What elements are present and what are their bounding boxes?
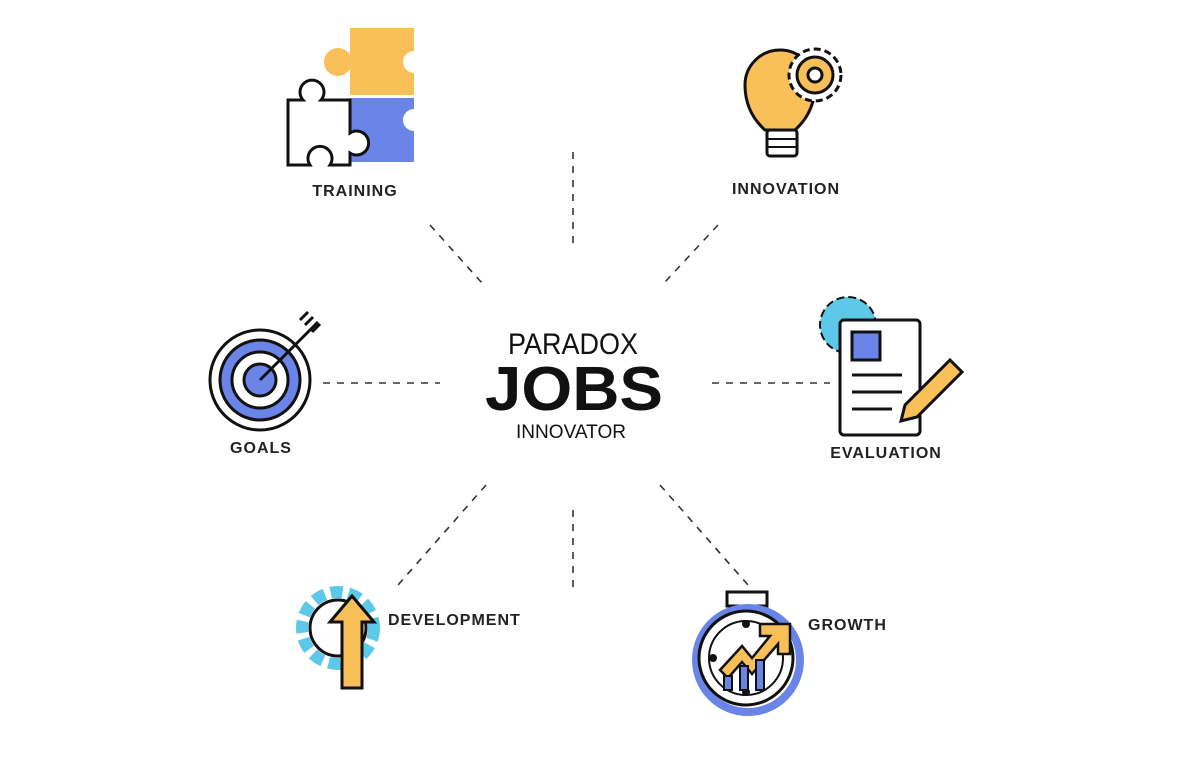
- icon: goals target: [210, 312, 320, 457]
- icon: growth stopwatch: [696, 592, 887, 712]
- title: INNOVATOR: [516, 422, 626, 443]
- icon: innovation bulb: [732, 49, 841, 198]
- icon: growth stopwatch: GROWTH: [808, 617, 887, 634]
- icon: goals target: GOALS: [230, 440, 292, 457]
- icon: evaluation document: [820, 297, 962, 462]
- icon: training puzzle: TRAINING: [312, 183, 398, 200]
- icon: innovation bulb: INNOVATION: [732, 181, 840, 198]
- title: [485, 328, 663, 443]
- icon: evaluation document: EVALUATION: [830, 445, 942, 462]
- icon: training puzzle: [288, 28, 425, 200]
- icon: development: [302, 592, 521, 688]
- title: JOBS: [485, 355, 663, 424]
- title: PARADOX: [508, 328, 638, 361]
- icon: development: DEVELOPMENT: [388, 612, 521, 629]
